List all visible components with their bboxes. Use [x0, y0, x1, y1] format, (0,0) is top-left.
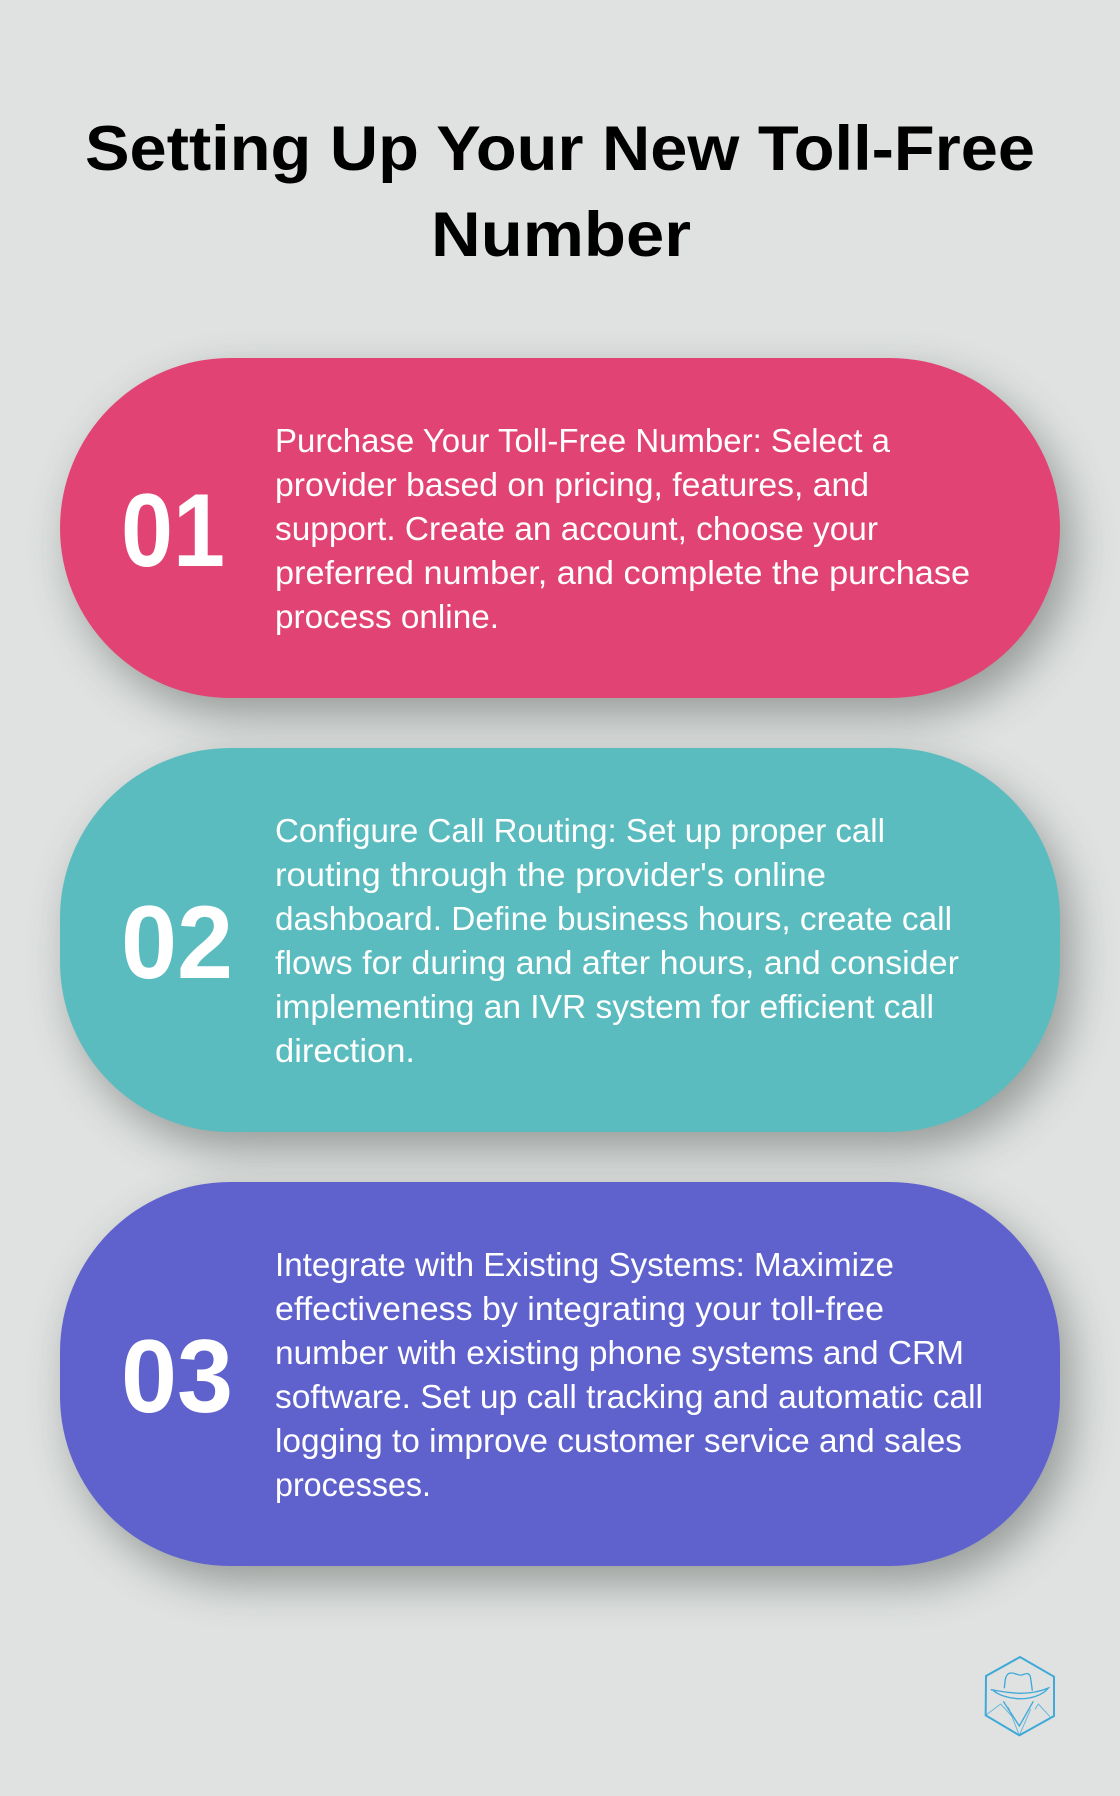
title — [85, 114, 1035, 270]
step 01 description: support. Create an account, choose your — [275, 510, 878, 547]
step 02 description: routing through the provider's online — [275, 856, 826, 893]
panel: step 01 — [60, 358, 1060, 698]
title: Setting Up Your New Toll-Free — [85, 114, 1035, 184]
step number 02: 02 — [121, 885, 233, 1001]
panel: step 03 — [60, 1182, 1060, 1566]
step 03 description — [275, 1246, 983, 1503]
icon: hexagon spy logo — [984, 1656, 1055, 1736]
step 02 description: dashboard. Define business hours, create call — [275, 900, 952, 937]
step 02 description: direction. — [275, 1032, 415, 1069]
step 03 description: processes. — [275, 1466, 431, 1503]
step number 03: 03 — [121, 1319, 233, 1435]
step 03 description: effectiveness by integrating your toll-free — [275, 1290, 884, 1327]
step 01 description: provider based on pricing, features, and — [275, 466, 869, 503]
step 02 description: flows for during and after hours, and consider — [275, 944, 959, 981]
step 03 description: number with existing phone systems and CRM — [275, 1334, 964, 1371]
step 02 description: implementing an IVR system for efficient call — [275, 988, 934, 1025]
step 01 description: preferred number, and complete the purchase — [275, 554, 970, 591]
step 01 description — [275, 422, 970, 635]
step 03 description: Integrate with Existing Systems: Maximize — [275, 1246, 894, 1283]
step 02 description: Configure Call Routing: Set up proper call — [275, 812, 885, 849]
step number 01: 01 — [121, 473, 225, 589]
step 01 description: Purchase Your Toll-Free Number: Select a — [275, 422, 891, 459]
step 03 description: software. Set up call tracking and automatic call — [275, 1378, 983, 1415]
step 03 description: logging to improve customer service and sales — [275, 1422, 962, 1459]
step 02 description — [275, 812, 959, 1069]
step 01 description: process online. — [275, 598, 499, 635]
title: Number — [431, 200, 691, 270]
panel: step 02 — [60, 748, 1060, 1132]
